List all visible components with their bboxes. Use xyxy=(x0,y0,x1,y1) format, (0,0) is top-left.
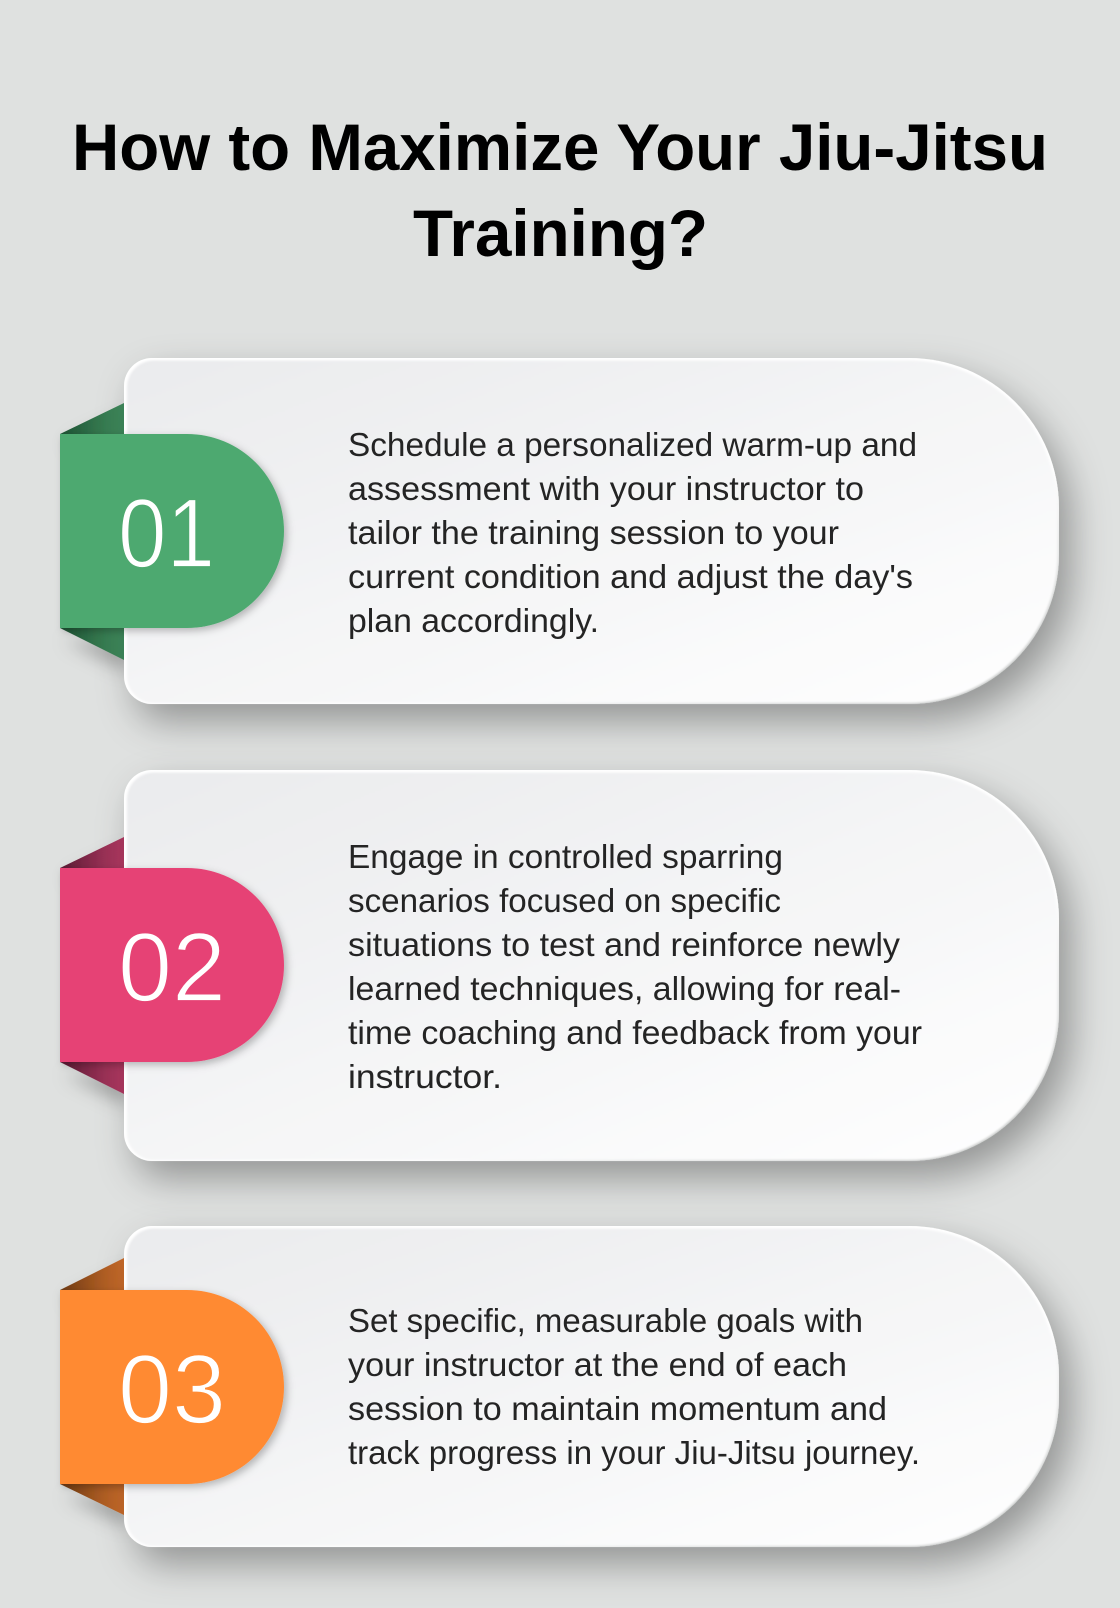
panel: step 2 xyxy=(60,770,1059,1161)
step 1 text xyxy=(348,426,917,639)
step 2 number badge xyxy=(60,868,284,1062)
step 3 number badge: 03 xyxy=(118,1334,226,1444)
step 1 card xyxy=(124,358,1059,704)
title: How to Maximize Your Jiu-Jitsu xyxy=(72,110,1048,184)
step 1 number badge xyxy=(60,434,284,628)
step 1 text: plan accordingly. xyxy=(348,602,599,639)
step 1 text: assessment with your instructor to xyxy=(348,470,864,507)
step 3 text: Set specific, measurable goals with xyxy=(348,1302,863,1339)
step 2 ribbon folds xyxy=(60,837,124,1094)
step 3 text xyxy=(348,1302,920,1471)
step 2 text xyxy=(348,838,922,1095)
panel: step 3 xyxy=(60,1226,1059,1547)
step 2 number badge: 02 xyxy=(118,912,226,1022)
step 2 text: instructor. xyxy=(348,1058,502,1095)
step 2 text: scenarios focused on specific xyxy=(348,882,781,919)
panel: step 1 xyxy=(60,358,1059,704)
step 1 text: current condition and adjust the day's xyxy=(348,558,913,595)
step 3 text: track progress in your Jiu-Jitsu journey. xyxy=(348,1434,920,1471)
step 2 card xyxy=(124,770,1059,1161)
title xyxy=(72,110,1048,270)
step 3 card xyxy=(124,1226,1059,1547)
step 3 ribbon folds xyxy=(60,1258,124,1515)
step 1 number badge: 01 xyxy=(118,478,215,588)
step 2 text: learned techniques, allowing for real- xyxy=(348,970,901,1007)
step 2 text: situations to test and reinforce newly xyxy=(348,926,901,963)
step 2 text: time coaching and feedback from your xyxy=(348,1014,922,1051)
step 1 text: tailor the training session to your xyxy=(348,514,839,551)
step 3 number badge xyxy=(60,1290,284,1484)
title: Training? xyxy=(413,196,708,270)
step 3 text: session to maintain momentum and xyxy=(348,1390,887,1427)
step 2 text: Engage in controlled sparring xyxy=(348,838,783,875)
step 3 text: your instructor at the end of each xyxy=(348,1346,847,1383)
step 1 text: Schedule a personalized warm-up and xyxy=(348,426,917,463)
step 1 ribbon folds xyxy=(60,403,124,660)
